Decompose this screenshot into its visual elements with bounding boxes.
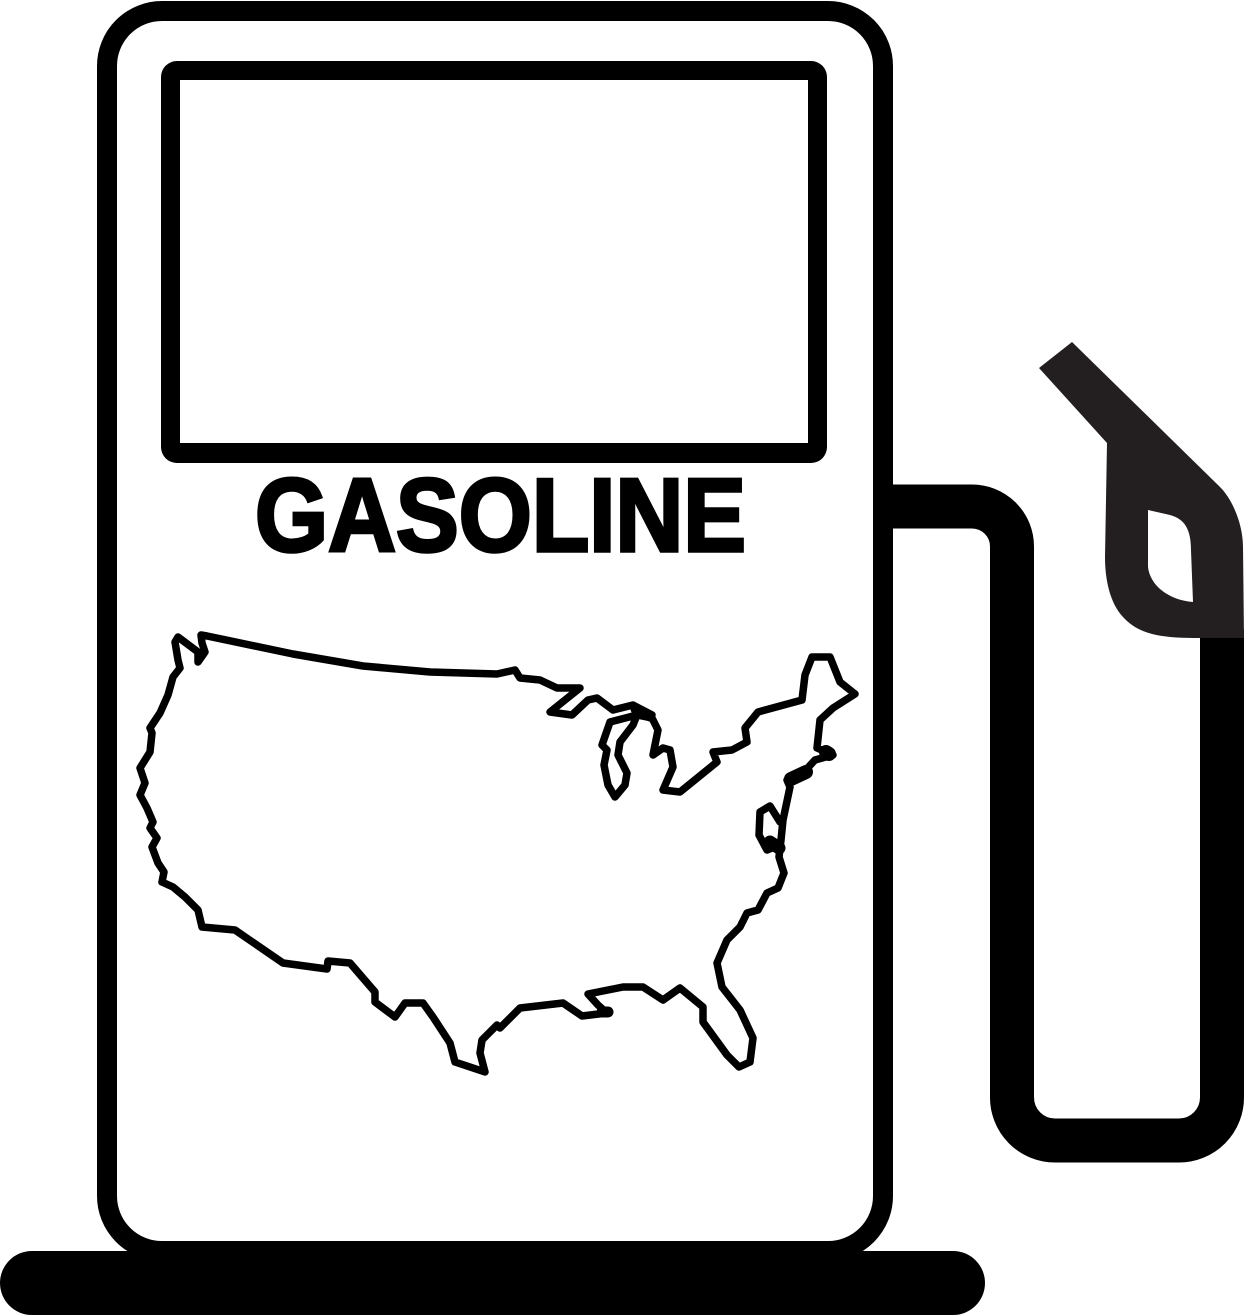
map: continental United States outline	[140, 635, 855, 1072]
pump base	[0, 1251, 985, 1315]
long island	[791, 772, 806, 779]
heading: GASOLINE: GASOLINE	[255, 458, 746, 574]
upper lakes junction	[636, 709, 650, 716]
pump hose	[885, 506, 1222, 1140]
lake michigan	[602, 715, 637, 797]
chesapeake bay	[759, 806, 780, 850]
display screen	[161, 61, 827, 463]
fuel nozzle	[1039, 342, 1244, 638]
pump body	[107, 11, 883, 1251]
chesapeake mass	[770, 842, 779, 848]
cape cod	[826, 752, 829, 754]
gulf delta	[602, 1006, 608, 1018]
